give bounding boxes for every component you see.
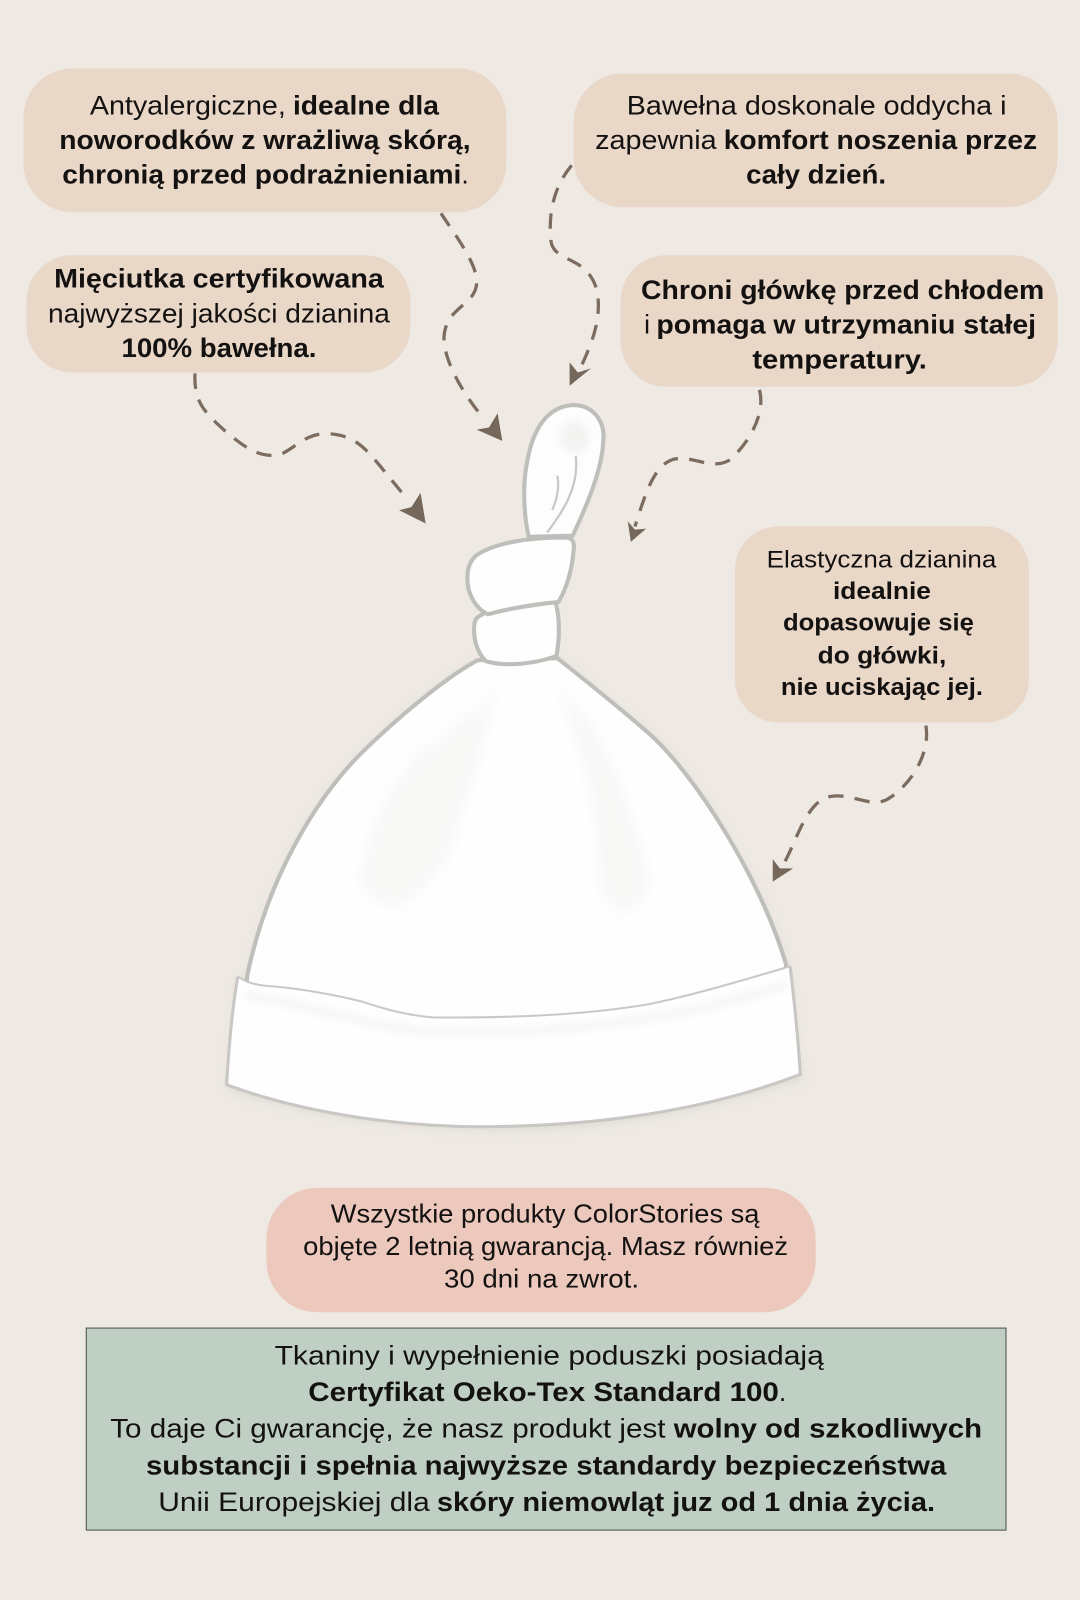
panel: warranty <box>266 1188 816 1312</box>
dome fold left <box>359 685 498 907</box>
panel: Oeko-Tex certificate: Tkaniny i wypełnienie poduszki posiadają <box>275 1340 824 1370</box>
panel: breathable cotton: komfort noszenia przez <box>724 125 1037 155</box>
arrow: temperature to hat <box>628 390 761 542</box>
panel: breathable cotton: cały dzień. <box>746 160 886 190</box>
brim outer edge <box>227 966 800 1127</box>
panel: warranty: Wszystkie produkty ColorStories są <box>331 1200 760 1228</box>
panel: Oeko-Tex certificate: skóry niemowląt juz od 1 dnia życia. <box>437 1487 935 1517</box>
panel: temperature protection <box>621 255 1058 387</box>
panel: warranty: objęte 2 letnią gwarancją. Masz również <box>303 1233 788 1261</box>
panel: temperature protection: Chroni główkę przed chłodem <box>641 275 1044 305</box>
hat dome <box>247 658 786 1031</box>
brim fold line <box>238 966 790 1017</box>
panel: hypoallergenic: . <box>461 160 469 190</box>
panel: hypoallergenic: noworodków z wrażliwą skórą, <box>59 125 471 155</box>
arrow: soft knit to hat <box>195 373 426 523</box>
arrow: elastic knit to hat <box>773 726 927 882</box>
panel: soft certified knit <box>27 255 410 372</box>
panel: temperature protection: i <box>644 310 650 340</box>
panel: soft certified knit: 100% bawełna. <box>121 333 316 363</box>
panel: Oeko-Tex certificate: wolny od szkodliwych <box>673 1414 982 1444</box>
panel: Oeko-Tex certificate <box>86 1328 1006 1530</box>
panel: breathable cotton: zapewnia <box>595 125 717 155</box>
lower knot band <box>474 602 559 664</box>
panel: temperature protection: pomaga w utrzymaniu stałej <box>656 310 1036 340</box>
panel: elastic knit: dopasowuje się <box>783 610 974 637</box>
panel: warranty: 30 dni na zwrot. <box>444 1266 639 1294</box>
panel: elastic knit: nie uciskając jej. <box>781 674 983 701</box>
upper knot <box>467 538 574 614</box>
soft hat shadow <box>227 657 802 1131</box>
panel: Oeko-Tex certificate: Certyfikat Oeko-Tex Standard 100 <box>308 1377 779 1407</box>
loop of knot <box>524 405 603 537</box>
panel: breathable cotton: Bawełna doskonale oddycha i <box>627 90 1007 120</box>
panel: elastic knit: do główki, <box>818 642 946 669</box>
dome fold right <box>559 687 649 913</box>
panel: elastic knit: Elastyczna dzianina <box>767 546 997 573</box>
panel: soft certified knit: Mięciutka certyfikowana <box>54 264 384 294</box>
panel: temperature protection: temperatury. <box>752 344 927 374</box>
panel: Oeko-Tex certificate: . <box>779 1377 786 1407</box>
panel: elastic knit <box>735 527 1029 722</box>
illustration: white baby hat with knot <box>227 405 802 1131</box>
brim shading <box>245 985 786 1033</box>
panel: Oeko-Tex certificate: substancji i spełnia najwyższe standardy bezpieczeństwa <box>146 1450 947 1480</box>
panel: Oeko-Tex certificate: To daje Ci gwarancję, że nasz produkt jest <box>110 1414 666 1444</box>
arrow: hypoallergenic to hat <box>441 213 502 441</box>
hat brim <box>227 966 800 1127</box>
loop shading <box>560 420 589 453</box>
panel: breathable cotton <box>574 73 1058 207</box>
panel: hypoallergenic: idealne dla <box>293 90 439 120</box>
arrow: breathable cotton to hat loop <box>550 165 598 386</box>
panel: hypoallergenic: Antyalergiczne, <box>90 90 286 120</box>
panel: elastic knit: idealnie <box>833 578 931 605</box>
panel: hypoallergenic: chronią przed podrażnieniami <box>62 160 461 190</box>
panel: soft certified knit: najwyższej jakości dzianina <box>48 298 390 328</box>
panel: hypoallergenic <box>23 68 506 212</box>
loop slit <box>547 456 576 533</box>
panel: Oeko-Tex certificate: Unii Europejskiej dla <box>158 1487 430 1517</box>
